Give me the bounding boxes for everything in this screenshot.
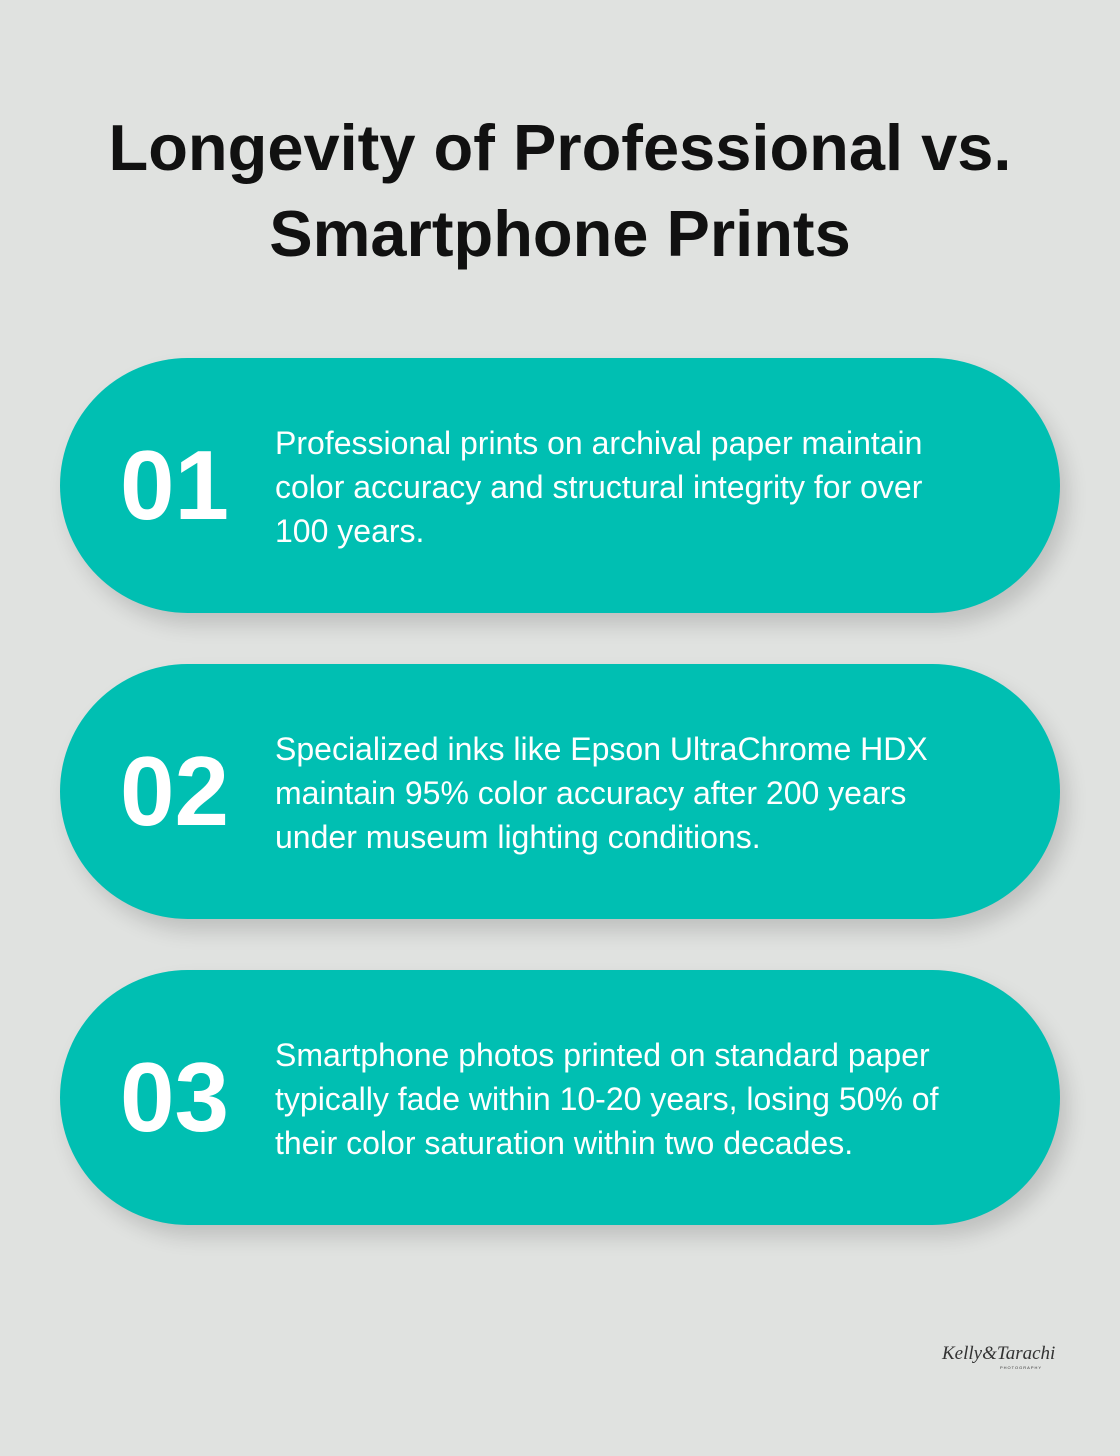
- title: Longevity of Professional vs.: [108, 111, 1012, 184]
- logo: signature: PHOTOGRAPHY: [1000, 1365, 1042, 1370]
- number 03: 03: [120, 1042, 229, 1152]
- number 01: 01: [120, 430, 229, 540]
- text 01: Professional prints on archival paper maintain color accuracy and structural integrity for over 100 years.: [275, 424, 922, 548]
- panel: item 02: [60, 664, 1060, 919]
- text 02: Specialized inks like Epson UltraChrome HDX maintain 95% color accuracy after 200 years under museum lighting conditions.: [275, 730, 928, 854]
- title: Smartphone Prints: [269, 197, 851, 270]
- number 02: 02: [120, 736, 229, 846]
- title: [108, 111, 1012, 270]
- logo: signature: Kelly&Tarachi: [942, 1343, 1055, 1364]
- panel: item 03: [60, 970, 1060, 1225]
- text 03: Smartphone photos printed on standard paper typically fade within 10-20 years, losing 50% of their color saturation within two decades.: [275, 1036, 938, 1160]
- panel: item 01: [60, 358, 1060, 613]
